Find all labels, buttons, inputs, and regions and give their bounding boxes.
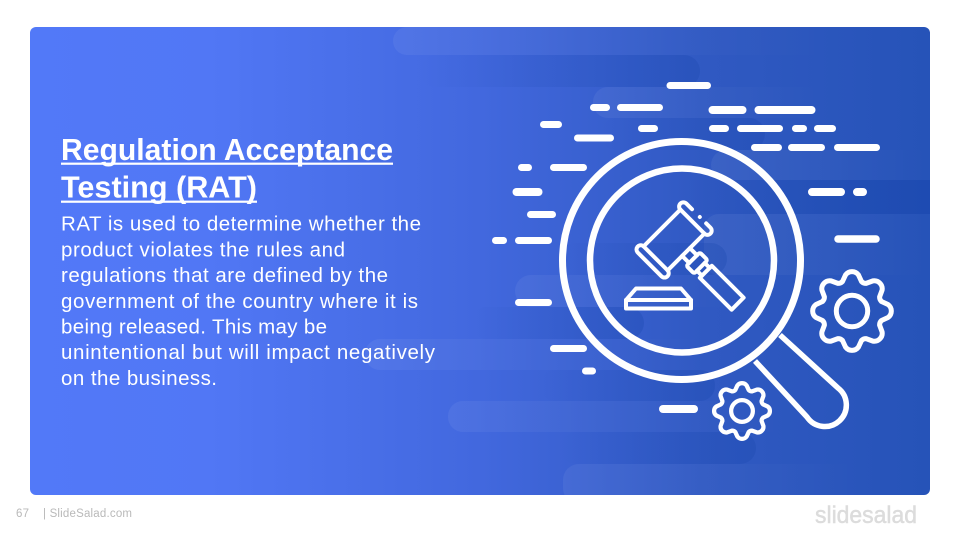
motion dashes — [496, 86, 876, 409]
body text: RAT is used to determine whether the — [61, 212, 421, 236]
footer site name: | SlideSalad.com — [43, 508, 132, 520]
body text: being released. This may be — [61, 316, 327, 338]
heading: Testing (RAT) — [61, 170, 257, 204]
page number: 67 — [16, 508, 29, 520]
icon: small gear — [714, 383, 770, 439]
body text: product violates the rules and — [61, 238, 345, 261]
body text: regulations that are defined by the — [61, 264, 388, 287]
icon: gavel — [626, 200, 763, 328]
body text — [61, 212, 436, 390]
icon: large gear — [813, 272, 891, 350]
heading: Regulation Acceptance — [61, 132, 393, 167]
body text: government of the country where it is — [61, 290, 418, 313]
body text: on the business. — [61, 367, 217, 390]
body text: unintentional but will impact negatively — [61, 341, 436, 364]
heading — [61, 132, 393, 204]
icon: magnifying glass — [562, 142, 846, 427]
logo wordmark: slidesalad — [815, 502, 917, 529]
